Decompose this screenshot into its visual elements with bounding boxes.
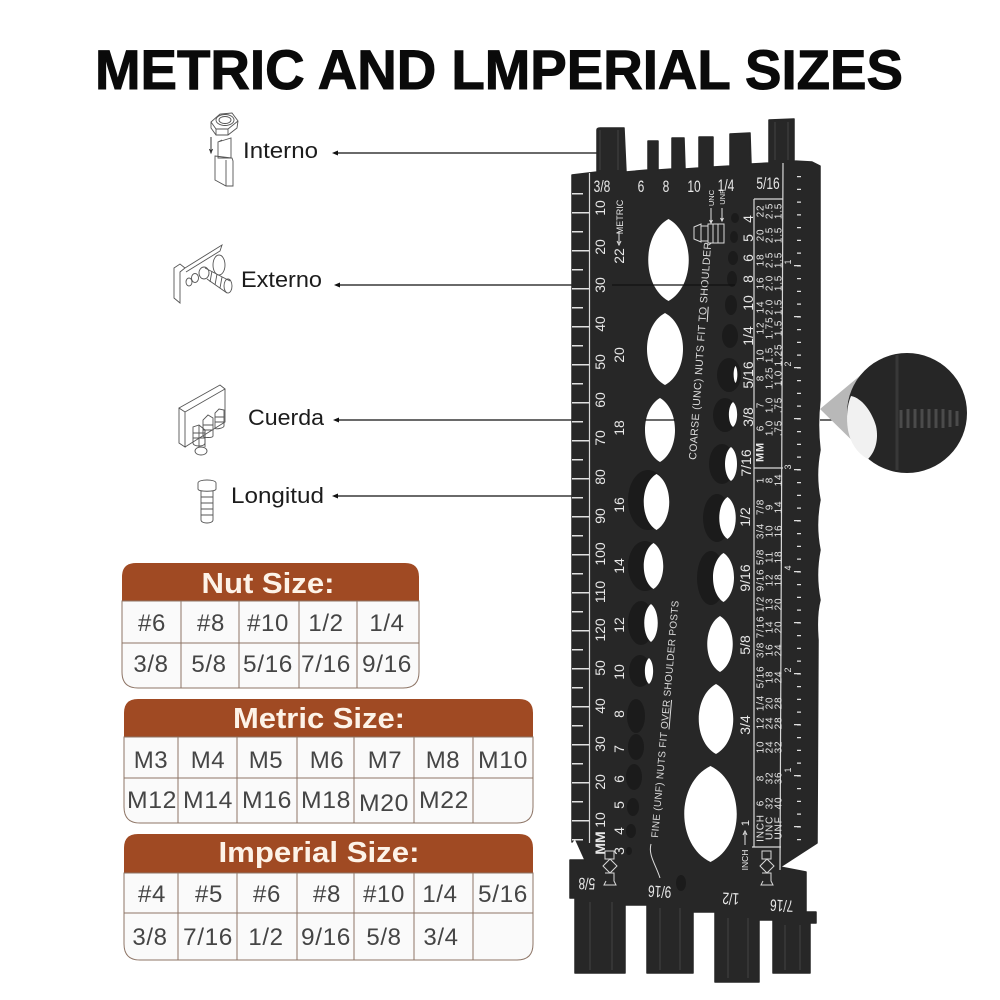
metric ruler numbers: 20: [592, 774, 608, 790]
imperial hole sizes: 7/16: [738, 449, 754, 477]
thread pitch table lower: 8: [756, 775, 766, 781]
countersink shadows: [626, 213, 741, 891]
panel: Nut Size table: 7/16: [301, 651, 351, 678]
top post labels: 1/4: [718, 177, 734, 196]
thread pitch table lower: 18: [774, 574, 784, 586]
panel: Nut Size table: 3/8: [133, 651, 169, 678]
thread pitch table lower: 3/8: [756, 642, 766, 658]
top post labels: 10: [687, 178, 701, 197]
panel: Metric Size table: M14: [183, 787, 233, 814]
panel: Imperial Size table: #5: [195, 881, 223, 908]
metric direction label: METRIC: [615, 199, 625, 234]
panel: Imperial Size table: #10: [363, 881, 405, 908]
panel: Metric Size table: M22: [419, 787, 469, 814]
panel: Imperial Size table: 1/4: [422, 881, 458, 908]
left ruler ticks: [578, 193, 580, 841]
metric ruler numbers: 70: [592, 430, 608, 446]
panel: Metric Size table: M8: [426, 747, 460, 774]
panel: Metric Size table: M7: [368, 747, 402, 774]
metric ruler numbers: [592, 200, 608, 855]
thread pitch table upper: 1.0: [764, 397, 776, 413]
top post labels: 5/16: [756, 175, 780, 194]
panel: Imperial Size table: #4: [138, 881, 166, 908]
thread pitch table lower: [756, 474, 784, 842]
metric hole sizes: [611, 248, 627, 855]
metric hole sizes: 3: [611, 847, 627, 855]
inch ruler numbers: 4: [783, 565, 793, 571]
thread pitch table lower: 9/16: [756, 569, 766, 591]
thread pitch table upper: 6: [756, 425, 766, 431]
panel: Nut Size table: Nut Size:: [202, 568, 334, 600]
thread pitch table upper: 1.0: [774, 370, 784, 386]
metric ruler numbers: 20: [592, 239, 608, 255]
panel: Imperial Size table: 3/8: [132, 924, 168, 951]
inch direction label: INCH: [740, 850, 750, 870]
post shading: [590, 122, 800, 978]
inch ruler numbers: 1: [783, 259, 793, 265]
bottom post labels: [578, 873, 794, 914]
thread pitch table upper: 1.75: [764, 317, 776, 339]
thread pitch table lower: 5/16: [756, 666, 766, 688]
thread pitch table lower: 14: [774, 474, 784, 486]
imperial hole sizes: 5: [740, 234, 756, 242]
metric ruler numbers: 50: [592, 354, 608, 370]
metric ruler numbers: 50: [592, 660, 608, 676]
panel: Imperial Size table: 1/2: [248, 924, 284, 951]
icon: screw: [198, 480, 216, 523]
panel: Imperial Size table: 7/16: [183, 924, 233, 951]
thread pitch table upper: 18: [756, 254, 766, 266]
metric hole sizes: 7: [611, 745, 627, 753]
inch ruler numbers: [783, 259, 793, 773]
thread pitch table lower: 24: [774, 671, 784, 683]
thread pitch table lower: 32: [764, 772, 776, 784]
title: METRIC AND LMPERIAL SIZES: [95, 38, 903, 101]
thread pitch table upper: .75: [774, 397, 784, 413]
panel: Nut Size table: #6: [138, 610, 166, 637]
inch ruler numbers: 2: [783, 361, 793, 367]
thread pitch table upper: 14: [756, 301, 766, 313]
thread pitch table lower: 8: [764, 477, 776, 483]
metric ruler numbers: 60: [592, 392, 608, 408]
magnifier: edge detail: [820, 353, 967, 473]
thread pitch table lower: 6: [756, 800, 766, 806]
thread pitch table lower: 7/8: [756, 499, 766, 515]
arrow lines over tool: [612, 285, 850, 420]
tool body silhouette: [570, 119, 820, 982]
panel: Imperial Size table: 5/16: [478, 881, 528, 908]
magnifier white notch: [847, 396, 877, 459]
thread pitch table lower: 9: [764, 504, 776, 510]
right ruler ticks: [797, 176, 799, 848]
thread pitch table lower: 24: [764, 741, 776, 753]
thread pitch table upper: 16: [756, 277, 766, 289]
nut icon with UNC UNF arrows: [694, 189, 727, 243]
thread pitch table lower: 5/8: [756, 549, 766, 565]
thread pitch table upper: 20: [756, 229, 766, 241]
metric hole sizes: 14: [611, 558, 627, 574]
panel: Metric Size table: M4: [191, 747, 225, 774]
panel: Nut Size table: #10: [247, 610, 289, 637]
panel: Nut Size table: 1/2: [308, 610, 344, 637]
metric ruler numbers: 40: [592, 698, 608, 714]
metric hole sizes: 4: [611, 827, 627, 835]
panel: Metric Size table: M5: [249, 747, 283, 774]
thread pitch table lower: 16: [774, 525, 784, 537]
rule lines: [590, 163, 783, 870]
thread pitch table lower: 18: [764, 671, 776, 683]
thread pitch table lower: 32: [774, 741, 784, 753]
thread pitch table lower: 10: [756, 741, 766, 753]
thread pitch table lower: UNC: [764, 816, 776, 840]
magnifier bands: [896, 355, 898, 470]
top post labels: 3/8: [594, 178, 610, 197]
panel: Metric Size table: M20: [359, 790, 409, 817]
panel: Metric Size table: M10: [478, 747, 528, 774]
magnifier pointer: [820, 364, 874, 462]
panel: Imperial Size table: #8: [313, 881, 341, 908]
metric ruler numbers: 30: [592, 736, 608, 752]
thread pitch table upper: 10: [756, 349, 766, 361]
thread pitch table lower: UNF: [774, 817, 784, 839]
panel: Metric Size table: M3: [134, 747, 168, 774]
thread pitch table upper: 7: [756, 402, 766, 408]
magnifier thread comb: [901, 409, 957, 428]
thread pitch table upper: 22: [756, 205, 766, 217]
thread pitch table upper: 1.5: [764, 347, 776, 363]
panel: Metric Size table: M16: [242, 787, 292, 814]
thread pitch table lower: 20: [774, 598, 784, 610]
label: Interno: Interno: [243, 138, 318, 163]
panel: Metric Size table: [124, 699, 533, 823]
thread pitch table lower: INCH: [756, 814, 766, 842]
imperial hole sizes: 5/16: [740, 361, 756, 389]
imperial hole sizes: 3/4: [737, 715, 753, 735]
label: Cuerda: Cuerda: [248, 405, 325, 430]
thread pitch table upper: 1.5: [774, 203, 784, 219]
imperial hole sizes: 10: [740, 295, 756, 311]
top post labels: 8: [663, 178, 669, 197]
panel: Imperial Size table: [124, 834, 533, 960]
thread pitch table upper: 1.5: [774, 227, 784, 243]
thread gauge tool: [570, 119, 820, 982]
thread pitch table lower: 16: [764, 644, 776, 656]
fine thread caption: FINE (UNF) NUTS FIT OVER SHOULDER POSTS: [650, 600, 682, 838]
white lens holes: [644, 219, 737, 862]
inch ruler numbers: 1: [783, 767, 793, 773]
metric ruler numbers: 110: [592, 581, 608, 603]
metric ruler numbers: 40: [592, 316, 608, 332]
metric ruler numbers: MM: [592, 831, 608, 855]
small bolt icons on bottom strip: [603, 851, 774, 885]
bottom post labels: 5/8: [578, 873, 595, 892]
inch ruler numbers: 2: [783, 667, 793, 673]
arrow: Interno: [332, 150, 612, 156]
thread pitch table upper: 2.5: [764, 252, 776, 268]
inch direction label: [740, 820, 752, 870]
metric hole sizes: 18: [611, 420, 627, 436]
metric hole sizes: 16: [611, 497, 627, 513]
thread pitch table upper: 2.0: [764, 275, 776, 291]
arrow: Cuerda: [333, 418, 580, 422]
bottom post labels: 1/2: [722, 888, 740, 907]
panel: Metric Size table: M12: [127, 787, 177, 814]
imperial hole sizes: 4: [740, 215, 756, 223]
thread pitch table upper: 12: [756, 322, 766, 334]
imperial hole sizes: 1/4: [740, 326, 756, 346]
fine arrow: [650, 844, 660, 878]
thread pitch table lower: 28: [774, 717, 784, 729]
thread pitch table lower: 20: [764, 697, 776, 709]
coarse thread caption: COARSE (UNC) NUTS FIT TO SHOULDER: [687, 241, 714, 460]
thread pitch table lower: 1/4: [756, 695, 766, 711]
panel: Nut Size table: 9/16: [362, 651, 412, 678]
thread pitch table lower: 11: [764, 551, 776, 563]
metric ruler numbers: 30: [592, 277, 608, 293]
metric ruler numbers: 100: [592, 542, 608, 566]
thread pitch table upper: 1.25: [774, 344, 784, 366]
thread pitch table upper: 1.5: [774, 320, 784, 336]
thread pitch table lower: 36: [774, 772, 784, 784]
metric hole sizes: 20: [611, 347, 627, 363]
panel: Nut Size table: [122, 563, 419, 688]
metric ruler numbers: 120: [592, 618, 608, 642]
panel: Nut Size table: 1/4: [369, 610, 405, 637]
metric hole sizes: 10: [611, 664, 627, 680]
thread pitch table lower: 14: [774, 501, 784, 513]
label: Externo: Externo: [241, 267, 322, 292]
panel: Imperial Size table: 3/4: [423, 924, 459, 951]
magnifier disc: [847, 353, 967, 473]
thread pitch table lower: 12: [756, 717, 766, 729]
thread pitch table upper: [754, 203, 784, 462]
thread pitch table lower: 40: [774, 797, 784, 809]
panel: Metric Size table: M6: [310, 747, 344, 774]
panel: Imperial Size table: Imperial Size:: [218, 837, 420, 869]
icon: bolt through bracket: [174, 245, 232, 303]
thread pitch table upper: 2.0: [764, 299, 776, 315]
metric hole sizes: 5: [611, 801, 627, 809]
thread pitch table lower: 7/16: [756, 616, 766, 638]
thread pitch table lower: 24: [764, 717, 776, 729]
panel: Nut Size table: 5/8: [191, 651, 227, 678]
nut icon with UNC UNF arrows: UNF: [718, 189, 727, 205]
thread pitch table lower: 24: [774, 644, 784, 656]
imperial hole sizes: 3/8: [740, 407, 756, 427]
thread pitch table upper: 8: [756, 375, 766, 381]
panel: Metric Size table: M18: [301, 787, 351, 814]
imperial hole sizes: 1/2: [737, 507, 753, 527]
panel: Nut Size table: #8: [197, 610, 225, 637]
imperial hole sizes: 6: [740, 254, 756, 262]
metric ruler numbers: 80: [592, 469, 608, 485]
thread pitch table lower: 14: [764, 621, 776, 633]
imperial hole sizes: 9/16: [737, 564, 753, 592]
thread pitch table lower: 32: [764, 797, 776, 809]
panel: Metric Size table: Metric Size:: [233, 703, 405, 735]
bottom post labels: 9/16: [648, 881, 672, 900]
metric hole sizes: 8: [611, 710, 627, 718]
thread pitch table upper: 1.5: [774, 275, 784, 291]
thread pitch table upper: .75: [774, 420, 784, 436]
imperial hole sizes: 5/8: [737, 635, 753, 655]
nut icon with UNC UNF arrows: UNC: [707, 189, 716, 206]
imperial hole sizes: [737, 215, 756, 735]
metric hole sizes: 12: [611, 617, 627, 633]
bottom post labels: 7/16: [770, 895, 794, 914]
label: Longitud: Longitud: [231, 483, 324, 508]
panel: Imperial Size table: 9/16: [301, 924, 351, 951]
thread pitch table lower: 3/4: [756, 523, 766, 539]
thread pitch table upper: 1.5: [774, 252, 784, 268]
inch ruler numbers: 3: [783, 464, 793, 470]
top post labels: 6: [638, 178, 644, 197]
thread pitch table upper: 1.5: [774, 299, 784, 315]
metric hole sizes: 22: [611, 248, 627, 264]
thread pitch table lower: 20: [774, 621, 784, 633]
thread pitch table lower: 10: [764, 525, 776, 537]
inch direction label: 1: [740, 820, 752, 826]
panel: Imperial Size table: 5/8: [366, 924, 402, 951]
thread pitch table lower: 1: [756, 477, 766, 483]
icon: threaded block: [179, 385, 225, 455]
thread pitch table upper: 2.5: [764, 227, 776, 243]
thread pitch table lower: 18: [774, 551, 784, 563]
thread pitch table upper: 2.5: [764, 203, 776, 219]
arrow: Externo: [334, 282, 612, 288]
metric hole sizes: 6: [611, 775, 627, 783]
thread pitch table lower: 13: [764, 598, 776, 610]
top post labels: [594, 175, 780, 197]
thread pitch table lower: 28: [774, 697, 784, 709]
thread pitch table lower: 1/2: [756, 596, 766, 612]
metric ruler numbers: 10: [592, 812, 608, 828]
imperial hole sizes: 8: [740, 275, 756, 283]
metric ruler numbers: 90: [592, 508, 608, 524]
metric ruler numbers: 10: [592, 200, 608, 216]
thread pitch table upper: 1.0: [764, 420, 776, 436]
thread pitch table upper: 1.25: [764, 367, 776, 389]
icon: nut over post: [210, 113, 238, 186]
panel: Nut Size table: 5/16: [243, 651, 293, 678]
thread pitch table upper: MM: [754, 442, 766, 462]
panel: Imperial Size table: #6: [253, 881, 281, 908]
arrow: Longitud: [332, 494, 583, 498]
thread pitch table lower: 12: [764, 574, 776, 586]
